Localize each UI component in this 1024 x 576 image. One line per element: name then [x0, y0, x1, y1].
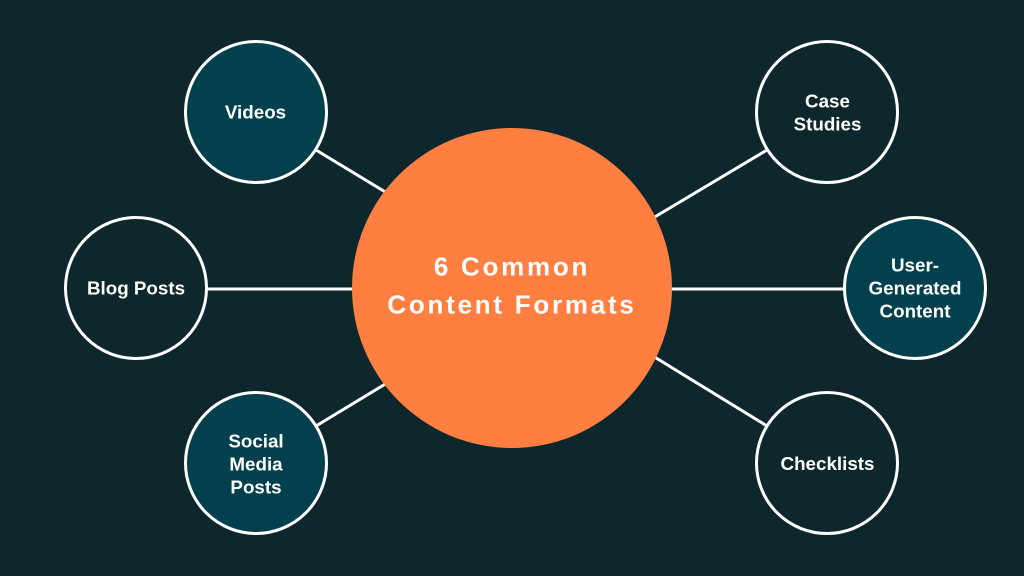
- node: User-Generated Content: Content: [880, 301, 951, 322]
- connector: Blog Posts: [207, 288, 360, 290]
- central circle: 6 Common Content Formats: Content Formats: [387, 290, 637, 320]
- node: Social Media Posts: Media: [229, 454, 283, 475]
- node: User-Generated Content: Generated: [869, 278, 961, 299]
- node: Social Media Posts: Posts: [230, 477, 282, 498]
- node: Social Media Posts: Social: [228, 431, 284, 452]
- node: User-Generated Content: User-: [891, 255, 939, 276]
- central circle: 6 Common Content Formats: 6 Common: [434, 252, 590, 282]
- node: Blog Posts: Blog Posts: [87, 278, 185, 298]
- connector: Videos: [316, 150, 392, 196]
- connector: Checklists: [648, 353, 767, 426]
- node: Blog Posts: [66, 218, 206, 358]
- connector: Case Studies: [648, 150, 767, 221]
- node: User-Generated Content: [844, 218, 986, 358]
- node: Videos: Videos: [225, 102, 286, 122]
- node: Social Media Posts: [186, 392, 326, 534]
- node: Checklists: [756, 392, 898, 534]
- central circle: 6 Common Content Formats: [352, 128, 672, 448]
- node: Case Studies: Case: [805, 91, 850, 112]
- node: Case Studies: Studies: [794, 114, 861, 135]
- node: Case Studies: [756, 42, 898, 182]
- connector: Social Media Posts: [316, 380, 392, 426]
- node: Videos: [186, 42, 326, 182]
- node: Checklists: Checklists: [781, 453, 874, 474]
- connector: User-Generated Content: [664, 288, 844, 290]
